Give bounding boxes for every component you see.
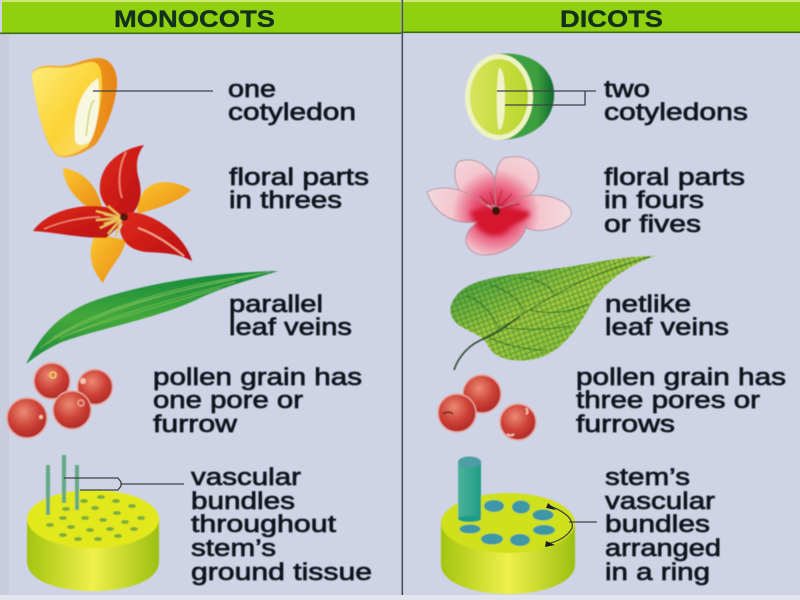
label: floral parts in fours or fives: floral parts — [604, 164, 745, 191]
label: pollen grain has three pores or furrows: pollen grain has — [576, 364, 786, 391]
label: floral parts in fours or fives: in fours — [604, 187, 704, 214]
icon: lime seed cross section — [465, 54, 554, 140]
icon: dicot pollen grains — [438, 375, 536, 440]
label: pollen grain has one pore or furrow: pollen grain has — [153, 364, 362, 391]
icon: monocot stem cross section — [27, 455, 159, 591]
label: vascular bundles throughout stem's ground tissue: ground tissue — [191, 559, 372, 586]
heading: dicots: DICOTS — [560, 6, 663, 33]
panel: dicots illustrations — [427, 54, 655, 594]
label: vascular bundles throughout stem's ground tissue: bundles — [191, 488, 295, 515]
panel: monocots header — [0, 0, 401, 34]
label: vascular bundles throughout stem's ground tissue: stem’s — [191, 535, 276, 562]
callout lines — [64, 91, 597, 547]
label: vascular bundles throughout stem's ground tissue: throughout — [191, 511, 336, 538]
icon: corn kernel — [32, 58, 117, 157]
icon: pink flower — [427, 157, 571, 255]
panel: monocots illustrations — [7, 58, 278, 591]
label: stem's vascular bundles arranged in a ring: bundles — [605, 511, 710, 538]
label: netlike leaf veins: leaf veins — [605, 314, 729, 341]
label: two cotyledons: cotyledons — [604, 99, 748, 126]
label: stem's vascular bundles arranged in a ring: vascular — [605, 488, 715, 515]
panel: dicots header — [401, 0, 800, 33]
label: parallel leaf veins: parallel — [229, 291, 323, 318]
label: floral parts in fours or fives: or fives — [604, 211, 701, 238]
text: monocot labels — [153, 76, 372, 586]
icon: parallel-veined leaf — [26, 271, 278, 364]
label: stem's vascular bundles arranged in a ring: in a ring — [605, 559, 710, 586]
label: one cotyledon: one — [228, 76, 276, 103]
label: pollen grain has one pore or furrow: furrow — [153, 411, 237, 438]
label: floral parts in threes: in threes — [229, 187, 342, 214]
label: two cotyledons: two — [604, 76, 650, 103]
center divider — [402, 0, 403, 595]
icon: dicot stem cross section — [441, 456, 575, 594]
label: stem's vascular bundles arranged in a ring: stem’s — [605, 464, 690, 491]
label: parallel leaf veins: leaf veins — [229, 314, 352, 341]
label: vascular bundles throughout stem's ground tissue: vascular — [191, 464, 301, 491]
icon: lily flower — [33, 145, 192, 283]
label: stem's vascular bundles arranged in a ring: arranged — [605, 535, 721, 562]
label: one cotyledon: cotyledon — [228, 99, 356, 126]
icon: monocot pollen grains — [7, 363, 112, 438]
label: netlike leaf veins: netlike — [605, 291, 691, 318]
label: pollen grain has three pores or furrows: three pores or — [576, 387, 760, 414]
label: floral parts in threes: floral parts — [229, 164, 369, 191]
icon: net-veined leaf — [450, 256, 655, 370]
heading: monocots: MONOCOTS — [114, 6, 275, 33]
label: pollen grain has one pore or furrow: one pore or — [153, 387, 303, 414]
text: dicot labels — [576, 76, 786, 586]
label: pollen grain has three pores or furrows: furrows — [576, 411, 675, 438]
